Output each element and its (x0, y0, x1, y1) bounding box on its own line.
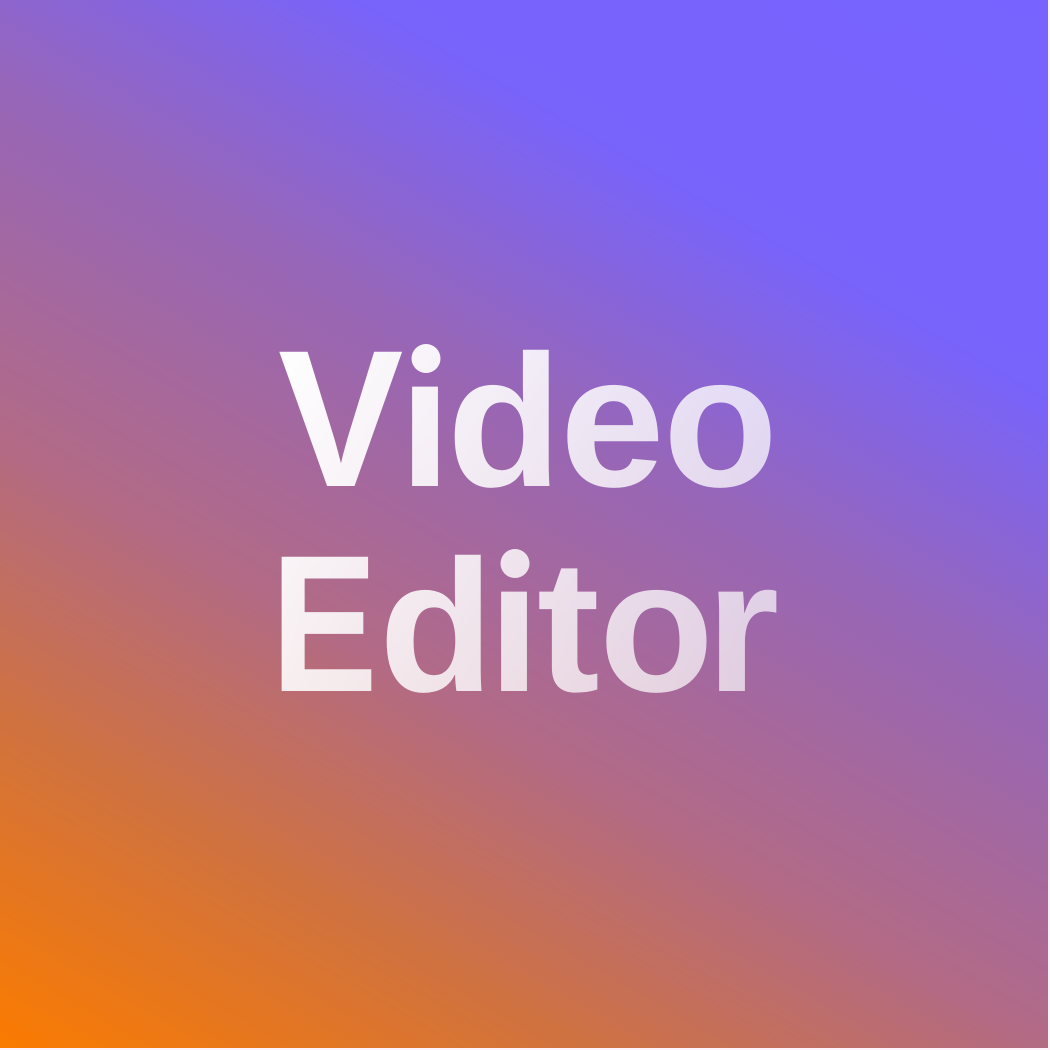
title line: Editor: d (379, 521, 494, 731)
title line: Editor: E (271, 515, 378, 733)
title line: Editor (282, 549, 776, 693)
title line: Video (279, 344, 770, 488)
title line: Editor: i (488, 521, 540, 731)
title line: Video: deo (447, 316, 778, 526)
title line: Video: V (278, 310, 403, 528)
title (279, 344, 776, 693)
title line: Editor: tor (537, 521, 779, 731)
title line: Video: i (399, 316, 451, 526)
